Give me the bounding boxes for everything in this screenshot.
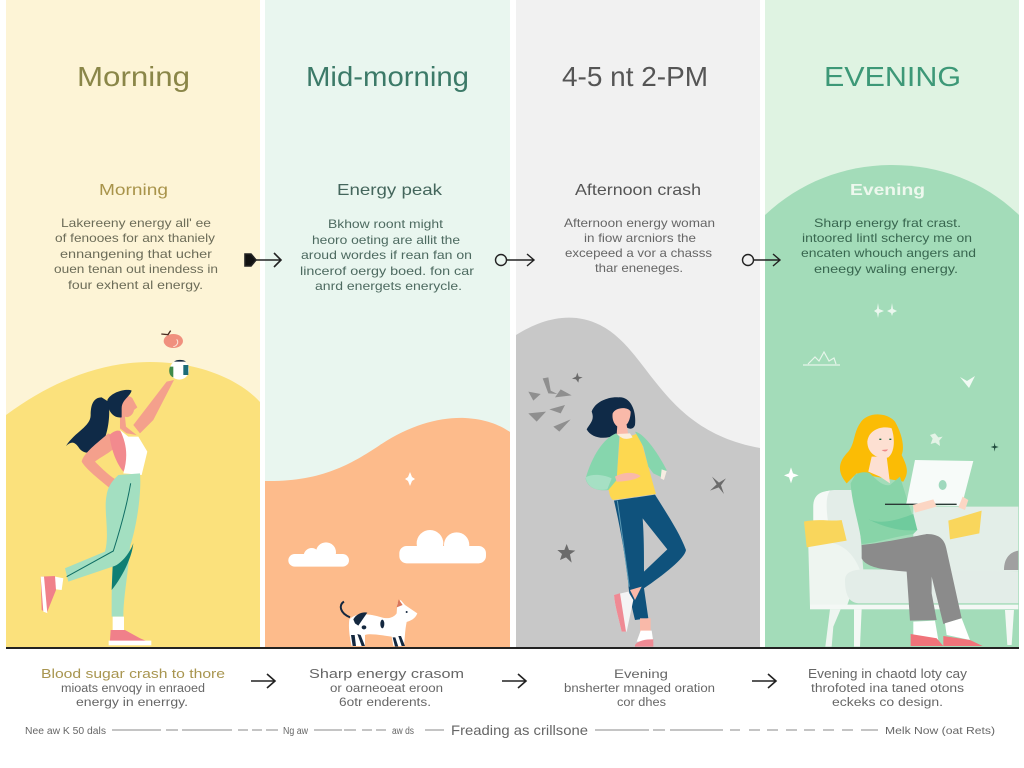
baseline rule — [6, 647, 1019, 649]
mid-morning subheading: Energy peak — [337, 182, 443, 199]
timeline footer: Melk Now (oat Rets) — [885, 726, 995, 737]
evening description: Sharp energy frat crast. — [814, 216, 961, 230]
caption: mid-morning: or oarneoeat eroon — [330, 683, 443, 695]
mid-morning description — [300, 217, 474, 293]
arrow: caption three — [752, 674, 776, 688]
afternoon subheading: Afternoon crash — [575, 182, 701, 199]
arrow: caption two — [502, 674, 526, 688]
arrow: afternoon to evening — [742, 254, 780, 266]
panel: mid-morning — [265, 0, 510, 648]
panel: morning — [6, 0, 260, 648]
mid-morning description: lincerof oergy boed. fon car — [300, 264, 474, 278]
caption: mid-morning: Sharp energy crasom — [309, 667, 464, 681]
icon: pillows — [804, 511, 982, 547]
leaning woman with birds and stars — [528, 373, 726, 647]
afternoon description: thar eneneges. — [595, 261, 683, 275]
caption: afternoon: cor dhes — [617, 697, 666, 709]
mid-morning description: anrd energets enerycle. — [315, 279, 462, 293]
caption: morning: Blood sugar crash to thore — [41, 667, 225, 681]
timeline footer: Ng aw — [283, 726, 309, 737]
evening description — [801, 216, 976, 276]
caption: morning: mioats envoqy in enraoed — [61, 683, 205, 695]
afternoon description: Afternoon energy woman — [564, 216, 715, 230]
morning title: Morning — [77, 61, 190, 92]
afternoon title: 4-5 nt 2-PM — [562, 61, 708, 92]
morning description: ouen tenan out inendess in — [54, 262, 218, 276]
afternoon description — [564, 216, 715, 275]
mid-morning hill — [265, 418, 510, 648]
panel: afternoon — [516, 0, 760, 648]
icon: small sparkles — [874, 303, 897, 318]
cloud left — [288, 542, 349, 567]
timeline footer — [25, 722, 995, 738]
icon: birds — [528, 377, 572, 432]
caption: evening: Evening in chaotd loty cay — [808, 667, 968, 681]
afternoon hill — [516, 318, 760, 648]
icon: sparkle — [405, 472, 415, 486]
evening subheading: Evening — [850, 182, 925, 199]
woman reaching up — [41, 331, 189, 645]
arrow: morning to mid-morning — [245, 253, 281, 267]
afternoon description: in fiow arcniors the — [584, 231, 696, 245]
evening hill — [765, 165, 1019, 648]
timeline footer: Freading as crillsone — [451, 722, 588, 738]
cat — [341, 599, 417, 647]
caption: evening — [808, 667, 968, 709]
icon: apple — [161, 331, 183, 348]
morning subheading: Morning — [99, 182, 168, 199]
caption: morning: energy in enerrgy. — [76, 697, 188, 709]
mid-morning title: Mid-morning — [306, 61, 469, 92]
caption: afternoon: bnsherter mnaged oration — [564, 683, 715, 695]
morning hill — [6, 362, 260, 648]
evening description: intoored lintl schercy me on — [802, 231, 972, 245]
caption: afternoon: Evening — [614, 669, 668, 681]
timeline footer: Nee aw K 50 dals — [25, 726, 106, 737]
caption: evening: throfoted ina taned otons — [811, 683, 964, 695]
caption: morning — [41, 667, 225, 709]
icon: heart sparkle — [960, 376, 975, 388]
mid-morning description: heoro oeting are allit the — [312, 233, 460, 247]
mid-morning description: Bkhow roont might — [328, 217, 444, 231]
arrow: caption one — [251, 674, 275, 688]
icon: stars — [557, 373, 726, 563]
caption: mid-morning — [309, 667, 464, 709]
caption: evening: eckeks co design. — [832, 697, 943, 709]
caption: afternoon — [564, 669, 715, 709]
afternoon description: excepeed a vor a chasss — [565, 246, 712, 260]
panel: evening — [765, 0, 1019, 648]
evening description: eneegy waling energy. — [814, 262, 958, 276]
sofa — [808, 490, 1018, 647]
cloud right — [399, 530, 486, 563]
mid-morning description: aroud wordes if rean fan on — [301, 248, 472, 262]
icon: cup in hand — [169, 360, 189, 380]
morning description: four exhent al energy. — [68, 278, 203, 292]
morning description: Lakereeny energy all' ee — [61, 216, 211, 230]
morning description: ennangening that ucher — [60, 247, 212, 261]
morning description — [54, 216, 218, 292]
timeline footer: aw ds — [392, 726, 414, 737]
arrow: mid-morning to afternoon — [496, 254, 534, 266]
morning description: of fenooes for anx thaniely — [55, 231, 215, 245]
woman with laptop on sofa — [784, 414, 1018, 647]
evening title: EVENING — [824, 61, 961, 92]
icon: sparkles — [784, 433, 999, 483]
caption: mid-morning: 6otr enderents. — [339, 697, 431, 709]
evening description: encaten whouch angers and — [801, 246, 976, 260]
icon: crown doodle — [803, 352, 840, 365]
